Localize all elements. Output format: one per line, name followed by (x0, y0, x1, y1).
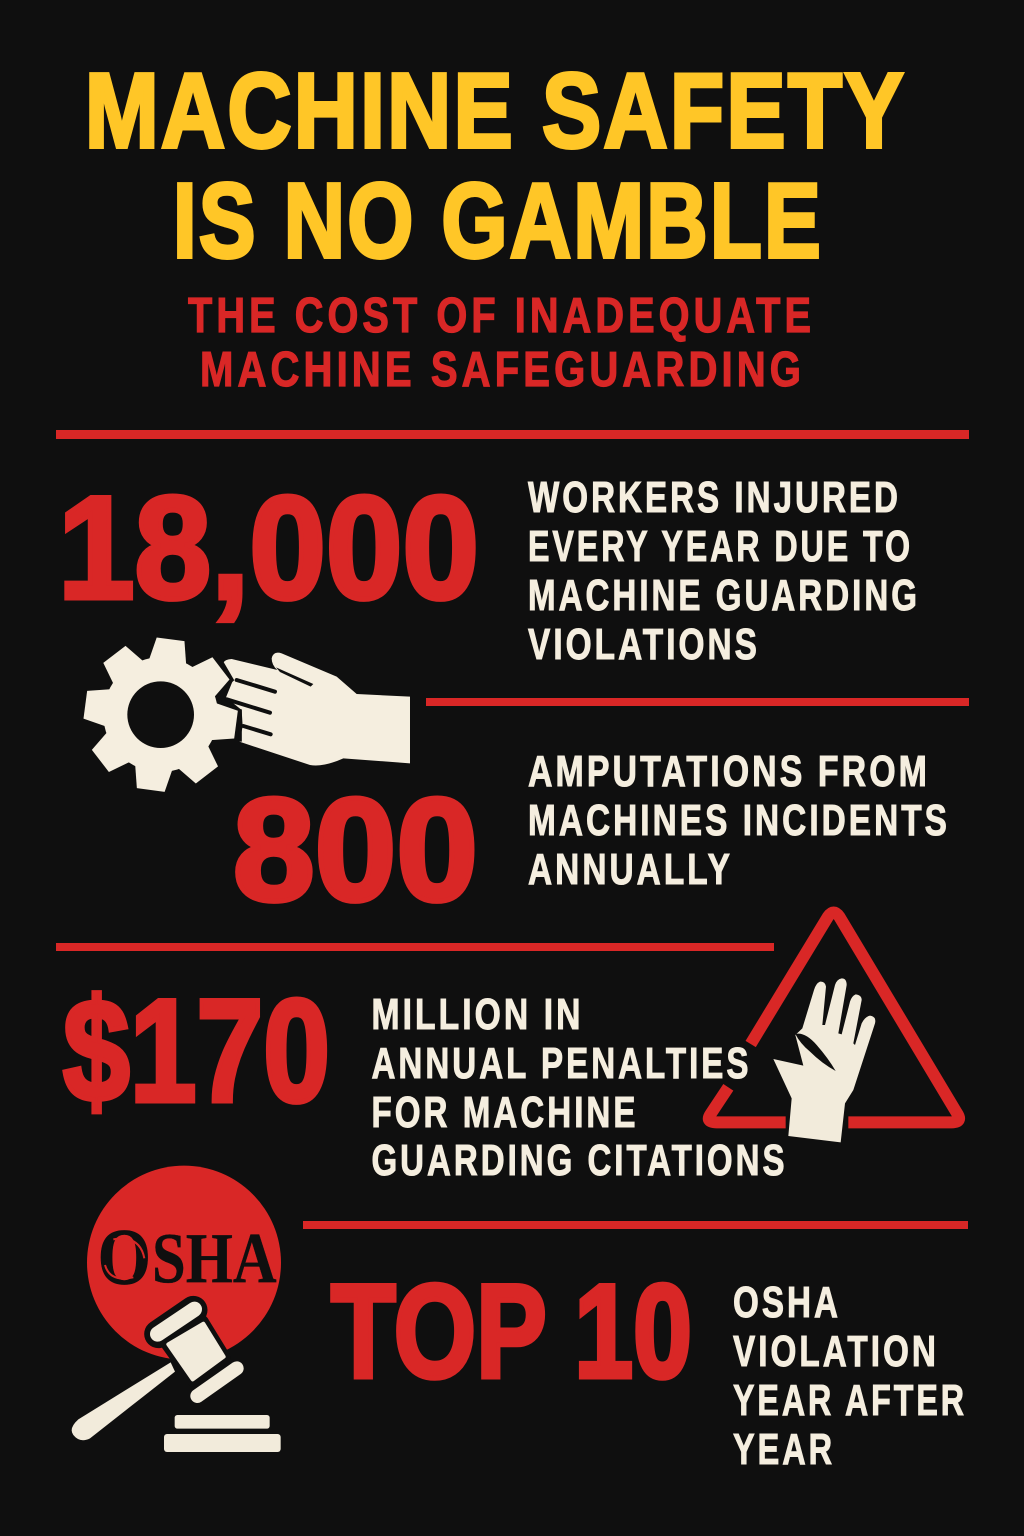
gear (83, 637, 238, 792)
text: amputations: ANNUALLY (528, 845, 733, 894)
hand (223, 653, 410, 765)
text: OSHA violation: YEAR (733, 1425, 835, 1474)
text: OSHA violation (733, 1278, 967, 1474)
subtitle: THE COST OF INADEQUATE (188, 289, 815, 343)
text: OSHA violation: OSHA (733, 1278, 841, 1327)
icon: OSHA seal with gavel (72, 1166, 281, 1452)
icon: gear and hand (83, 637, 410, 792)
text: workers injured: VIOLATIONS (528, 620, 760, 669)
subtitle: MACHINE SAFEGUARDING (200, 343, 805, 397)
OSHA wordmark: O (98, 1214, 151, 1302)
stat: 800: 800 (233, 768, 478, 931)
stat: top 10: TOP 10 (331, 1258, 692, 1406)
icon: warning triangle with hand (709, 912, 959, 1142)
text: OSHA violation: VIOLATION (733, 1327, 939, 1376)
text: workers injured (528, 473, 920, 669)
text: annual penalties: GUARDING CITATIONS (372, 1136, 788, 1185)
title (85, 52, 906, 280)
text: annual penalties (372, 990, 788, 1185)
stat: $170: $170 (63, 969, 330, 1132)
OSHA wordmark: SHA (152, 1218, 277, 1298)
title: IS NO GAMBLE (173, 162, 823, 280)
gavel (72, 1309, 281, 1452)
subtitle (188, 289, 815, 397)
text: annual penalties: MILLION IN (372, 990, 584, 1039)
text: annual penalties: FOR MACHINE (372, 1088, 638, 1137)
stat: 18,000: 18,000 (58, 466, 479, 629)
hand (773, 978, 875, 1142)
text: amputations (528, 747, 950, 894)
text: annual penalties: ANNUAL PENALTIES (372, 1039, 752, 1088)
OSHA wordmark (98, 1214, 277, 1302)
text: workers injured: WORKERS INJURED (528, 473, 901, 522)
